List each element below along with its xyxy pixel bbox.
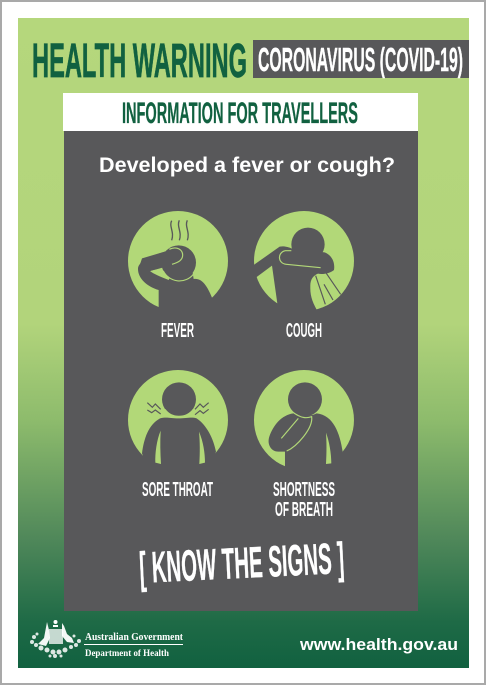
website url: www.health.gov.au xyxy=(299,635,458,654)
logo text: department of health: Department of Health xyxy=(85,648,169,658)
icon: shortness of breath xyxy=(254,370,354,477)
question heading: Developed a fever or cough? xyxy=(99,154,395,177)
main dark panel xyxy=(64,131,418,611)
logo: australian government crest xyxy=(30,620,81,658)
icon: cough xyxy=(250,211,354,313)
icon: sore throat xyxy=(128,370,228,477)
text: SORE THROAT xyxy=(142,479,213,501)
text: HEALTH WARNING xyxy=(32,35,247,88)
label: shortness of breath xyxy=(273,479,335,521)
label: shortness of breath: OF BREATH xyxy=(275,499,333,521)
logo text: department of health: Australian Government xyxy=(85,632,184,643)
logo text: department of health xyxy=(84,632,184,658)
text: SHORTNESS xyxy=(273,479,335,501)
subtitle panel: information for travellers xyxy=(63,93,418,131)
icon: fever xyxy=(128,211,228,315)
text: FEVER xyxy=(161,320,194,342)
text: COUGH xyxy=(286,320,322,342)
